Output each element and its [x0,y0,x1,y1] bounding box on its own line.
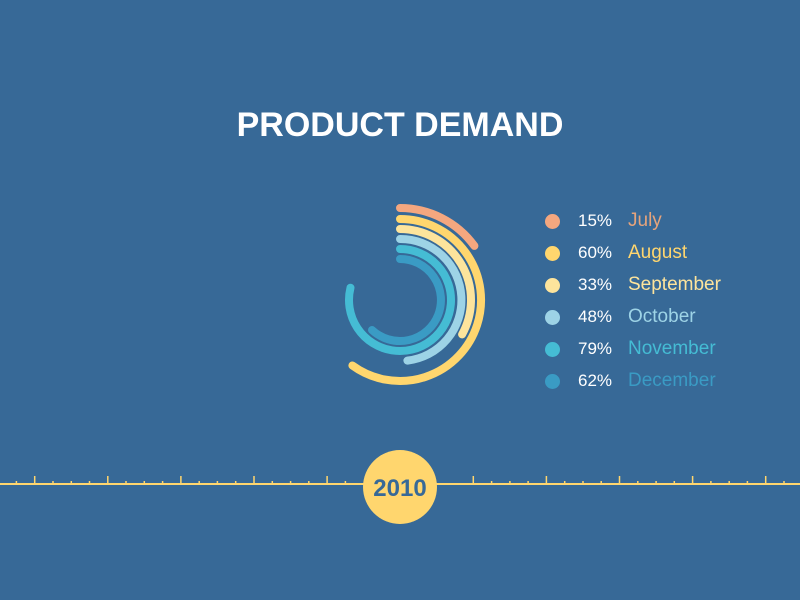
legend [545,210,721,391]
timeline [0,450,800,524]
legend item: July: 15% [578,211,612,230]
legend item: August: August [628,242,687,263]
legend item: November [545,338,716,359]
legend item: December: December [628,370,716,391]
legend item: October: October [628,306,696,327]
legend item: October [545,306,696,327]
legend item: December [545,370,716,391]
arc: November [349,249,451,351]
year marker: 2010 [373,475,427,502]
legend item: August: 60% [578,243,612,262]
legend item: August [545,242,687,263]
title: PRODUCT DEMAND [237,106,563,144]
legend item: September: 33% [578,275,612,294]
legend item: November: November [628,338,716,359]
arc: August [352,219,481,381]
legend item: October: 48% [578,307,612,326]
arc: September [400,229,471,334]
legend item: July [545,210,662,231]
arc: July [400,208,474,246]
legend item: December: 62% [578,371,612,390]
legend item: July: July [628,210,662,231]
arc: December [372,259,441,341]
legend item: September [545,274,721,295]
legend item: November: 79% [578,339,612,358]
year marker [363,450,437,524]
arc: October [400,239,461,361]
legend item: September: September [628,274,721,295]
